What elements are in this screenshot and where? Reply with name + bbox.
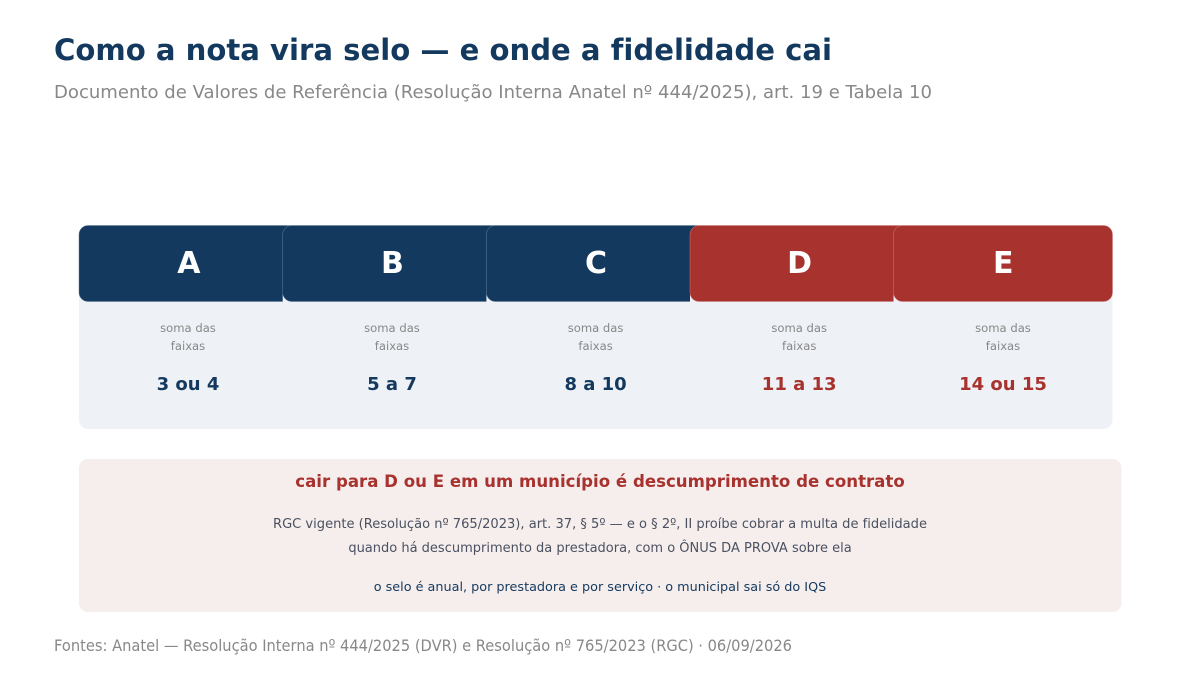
card C: soma das [568,321,623,335]
card E: faixas [986,339,1020,353]
card A: 3 ou 4 [157,374,219,395]
card C: faixas [578,339,613,353]
card D: faixas [782,339,816,353]
callout body: quando há descumprimento da prestadora, com o ÔNUS DA PROVA sobre ela [348,540,852,556]
card B: 5 a 7 [367,374,417,395]
card B [283,226,502,429]
callout body: RGC vigente (Resolução nº 765/2023), art. 37, § 5º — e o § 2º, II proíbe cobrar a multa de fidelidade [273,517,927,532]
card C: 8 a 10 [564,374,627,395]
panel: grade scale [79,226,1112,429]
card B: faixas [375,339,409,353]
callout note: o selo é anual, por prestadora e por serviço · o municipal sai só do IQS [374,580,826,595]
subtitle: Documento de Valores de Referência (Resolução Interna Anatel nº 444/2025), art. 19 e Tabela 10 [54,82,932,103]
callout body [273,517,927,556]
card A: soma das [160,321,216,335]
card D: D [787,246,812,281]
card B: B [381,246,404,281]
card C: C [585,246,607,281]
card E: soma das [975,321,1031,335]
card C [486,226,706,429]
card A [79,226,298,429]
panel: callout [79,459,1122,612]
card D: 11 a 13 [762,374,837,395]
card B: soma das [364,321,420,335]
card E: 14 ou 15 [959,374,1047,395]
title: Como a nota vira selo — e onde a fidelidade cai [54,33,832,67]
card D: soma das [771,321,827,335]
footer sources: Fontes: Anatel — Resolução Interna nº 444/2025 (DVR) e Resolução nº 765/2023 (RGC) · 06/09/2026 [54,636,792,655]
card E: E [993,246,1013,281]
card E [894,226,1112,429]
card D [690,226,910,429]
callout heading: cair para D ou E em um município é descumprimento de contrato [295,472,905,491]
card A: A [177,246,201,281]
card A: faixas [171,339,205,353]
